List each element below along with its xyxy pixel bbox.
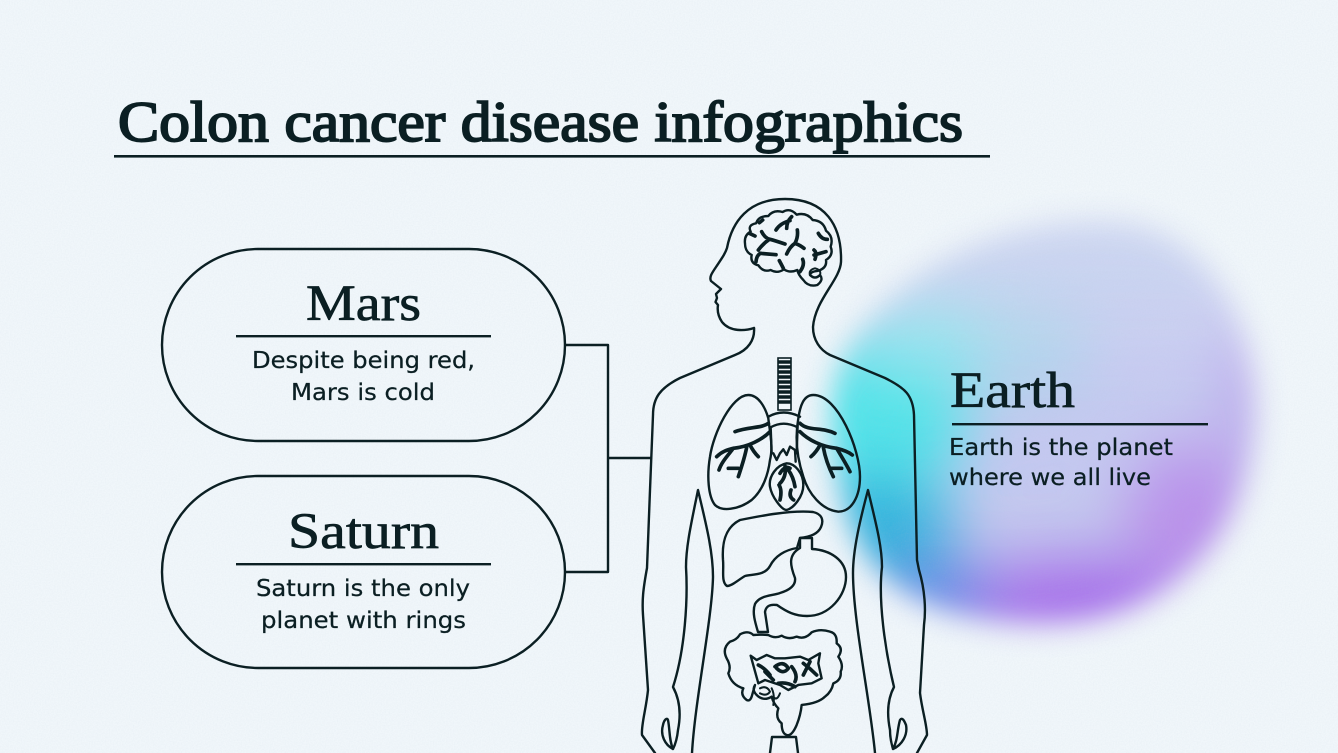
left inner arm bbox=[662, 490, 713, 753]
connector lines bbox=[565, 345, 651, 572]
panel: Earth bbox=[949, 363, 1208, 491]
large intestine bbox=[725, 630, 842, 735]
Mars description: Despite being red, bbox=[252, 346, 475, 374]
airway arcs bbox=[768, 412, 800, 453]
Saturn description: Saturn is the only bbox=[256, 574, 470, 602]
icon: brain bbox=[745, 210, 832, 286]
icon: colon bbox=[725, 630, 842, 735]
Earth description: Earth is the planet bbox=[949, 433, 1173, 461]
Mars description: Mars is cold bbox=[291, 378, 435, 406]
Saturn pill outline bbox=[162, 476, 565, 668]
Mars pill outline bbox=[162, 249, 565, 441]
panel: Mars bbox=[162, 249, 565, 441]
right inner arm bbox=[853, 490, 906, 753]
Mars rule bbox=[236, 335, 491, 337]
Earth description: where we all live bbox=[949, 463, 1151, 491]
small intestine bbox=[751, 653, 822, 690]
heart bbox=[770, 463, 803, 510]
infographic canvas bbox=[114, 100, 1278, 753]
Earth rule bbox=[952, 423, 1208, 425]
Earth description bbox=[949, 433, 1173, 491]
right bronchial tree bbox=[800, 423, 852, 477]
Mars heading: Mars bbox=[306, 276, 421, 332]
heart chambers bbox=[779, 466, 795, 500]
Saturn rule bbox=[236, 563, 491, 565]
icon: lungs and heart bbox=[708, 395, 860, 512]
icon: stomach bbox=[754, 538, 846, 632]
Saturn description: planet with rings bbox=[261, 606, 466, 634]
intestinal folds bbox=[758, 662, 817, 687]
left lung bbox=[708, 395, 771, 509]
icon: liver bbox=[723, 512, 822, 586]
aorta bbox=[773, 447, 796, 462]
Saturn heading: Saturn bbox=[288, 504, 439, 560]
title: Colon cancer disease infographics bbox=[118, 91, 963, 154]
icon: rectum bbox=[770, 737, 798, 753]
human body illustration bbox=[642, 199, 927, 753]
gradient blob bbox=[809, 211, 1272, 644]
Earth heading: Earth bbox=[950, 363, 1075, 419]
body outline bbox=[642, 199, 927, 753]
Saturn description bbox=[256, 574, 470, 634]
Mars description bbox=[252, 346, 475, 406]
panel: Saturn bbox=[162, 476, 565, 668]
title underline bbox=[114, 155, 990, 158]
icon: trachea bbox=[778, 358, 791, 410]
right lung bbox=[797, 395, 860, 512]
left bronchial tree bbox=[717, 423, 770, 477]
